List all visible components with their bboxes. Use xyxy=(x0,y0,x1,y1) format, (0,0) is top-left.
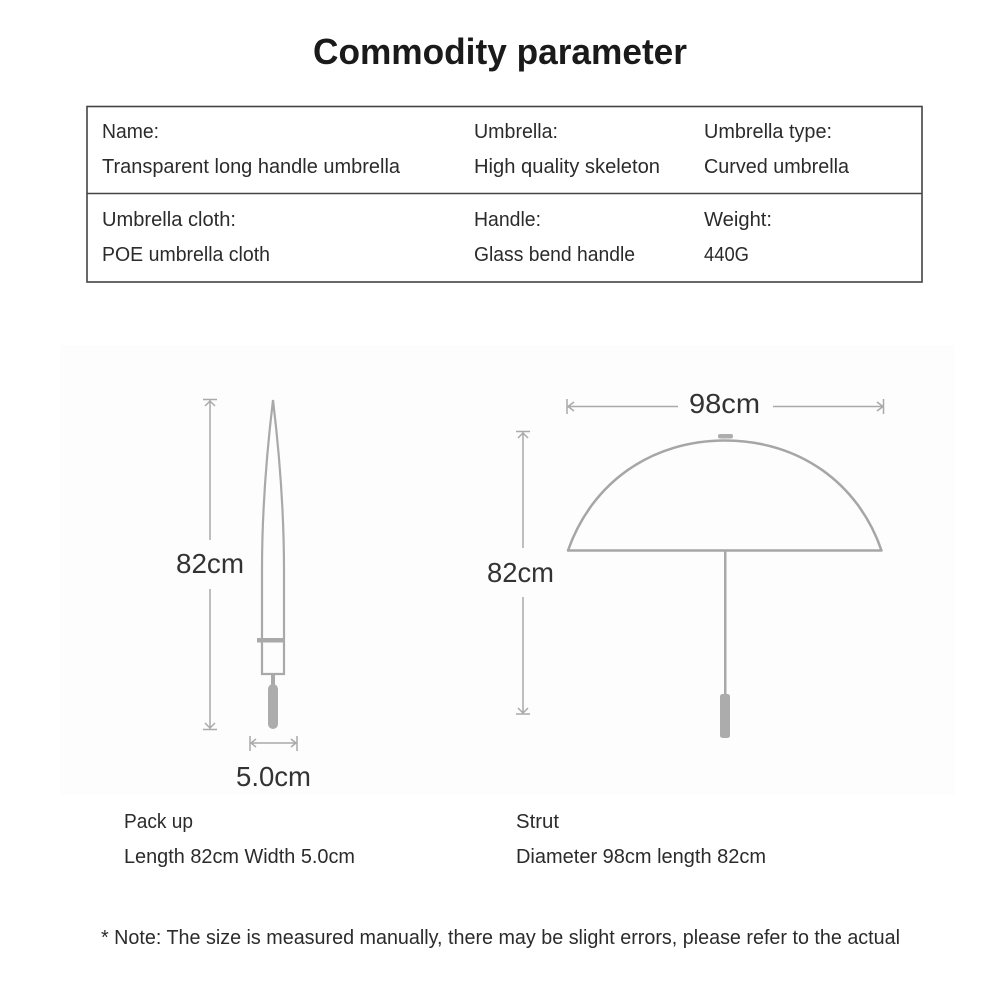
cell: weight xyxy=(704,209,772,266)
cell: umbrella type: Curved umbrella xyxy=(704,156,850,178)
diagram: closed umbrella xyxy=(257,400,284,729)
cell: weight: 440G xyxy=(704,244,749,266)
parameter table xyxy=(87,106,922,282)
caption: strut xyxy=(516,811,766,868)
cell: handle: Glass bend handle xyxy=(474,244,635,266)
dimension: closed height 82cm xyxy=(176,400,244,730)
cell: umbrella: Umbrella: xyxy=(474,121,558,143)
caption: strut: Diameter 98cm length 82cm xyxy=(516,846,766,868)
dimension: open diameter 98cm xyxy=(567,388,884,419)
caption: strut: Strut xyxy=(516,811,559,833)
cell: umbrella type: Umbrella type: xyxy=(704,121,832,143)
cell: handle: Handle: xyxy=(474,209,541,231)
footnote: * Note: The size is measured manually, there may be slight errors, please refer to the actual xyxy=(101,927,900,949)
dimension: closed width 5.0cm xyxy=(236,736,311,792)
dimension: closed height 82cm: 82cm xyxy=(176,548,244,579)
caption: pack up: Length 82cm Width 5.0cm xyxy=(124,846,355,868)
caption: pack up xyxy=(124,811,355,868)
cell: weight: Weight: xyxy=(704,209,772,231)
cell: umbrella xyxy=(474,121,660,178)
dimension: open diameter 98cm: 98cm xyxy=(689,388,760,419)
cell: umbrella cloth: POE umbrella cloth xyxy=(102,244,270,266)
cell: umbrella type xyxy=(704,121,850,178)
caption: pack up: Pack up xyxy=(124,811,193,833)
cell: umbrella cloth: Umbrella cloth: xyxy=(102,209,236,231)
cell: name: Name: xyxy=(102,121,159,143)
dimension: closed width 5.0cm: 5.0cm xyxy=(236,761,311,792)
panel: dimension diagrams xyxy=(60,345,955,795)
cell: name xyxy=(102,121,401,178)
cell: umbrella: High quality skeleton xyxy=(474,156,660,178)
dimension: open height 82cm: 82cm xyxy=(487,557,554,588)
cell: handle xyxy=(474,209,635,266)
cell: umbrella cloth xyxy=(102,209,270,266)
diagram: open umbrella xyxy=(568,434,882,738)
title: Commodity parameter xyxy=(313,31,687,72)
dimension: open height 82cm xyxy=(487,432,554,714)
cell: name: Transparent long handle umbrella xyxy=(102,156,401,178)
